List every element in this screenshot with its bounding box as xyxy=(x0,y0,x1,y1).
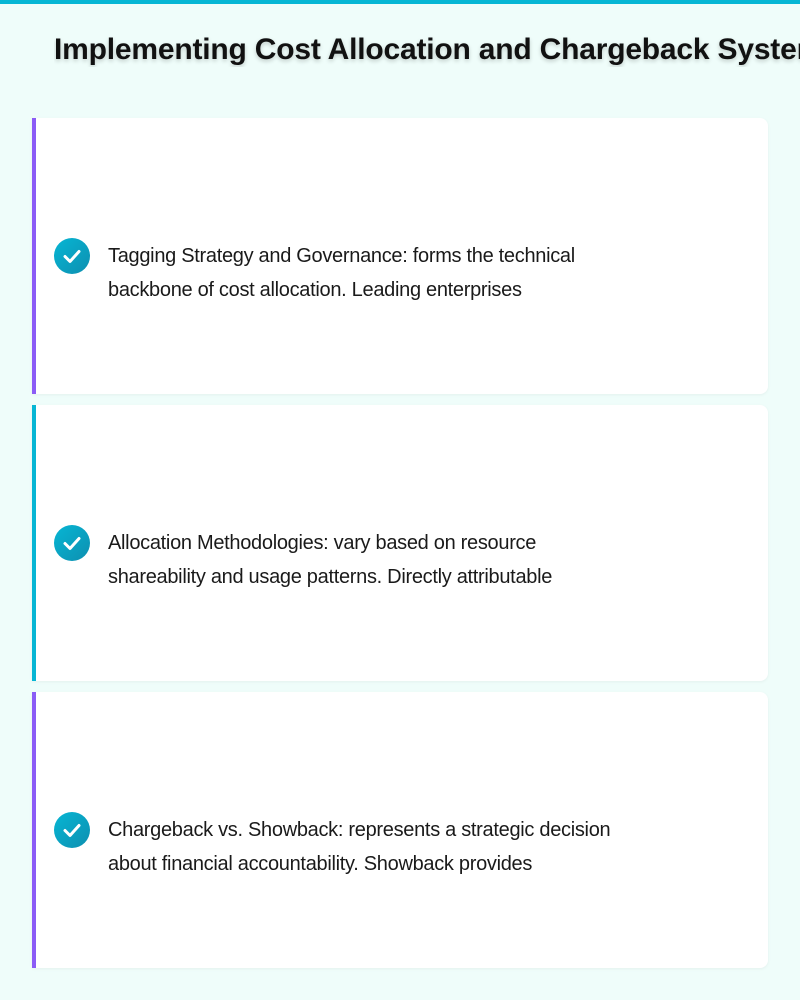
panel: allocation methodologies xyxy=(32,405,768,681)
text: chargeback: Chargeback vs. Showback: represents a strategic decision about financial accountability. Showback provides xyxy=(108,819,610,875)
text: allocation: Allocation Methodologies: vary based on resource shareability and usage patterns. Directly attributable xyxy=(108,532,552,588)
icon: check xyxy=(54,812,90,848)
text: tagging: Tagging Strategy and Governance: forms the technical backbone of cost allocation. Leading enterprises xyxy=(108,245,575,301)
icon: check xyxy=(54,525,90,561)
panel: chargeback vs showback xyxy=(32,692,768,968)
panel: tagging strategy xyxy=(32,118,768,394)
icon: check xyxy=(54,238,90,274)
